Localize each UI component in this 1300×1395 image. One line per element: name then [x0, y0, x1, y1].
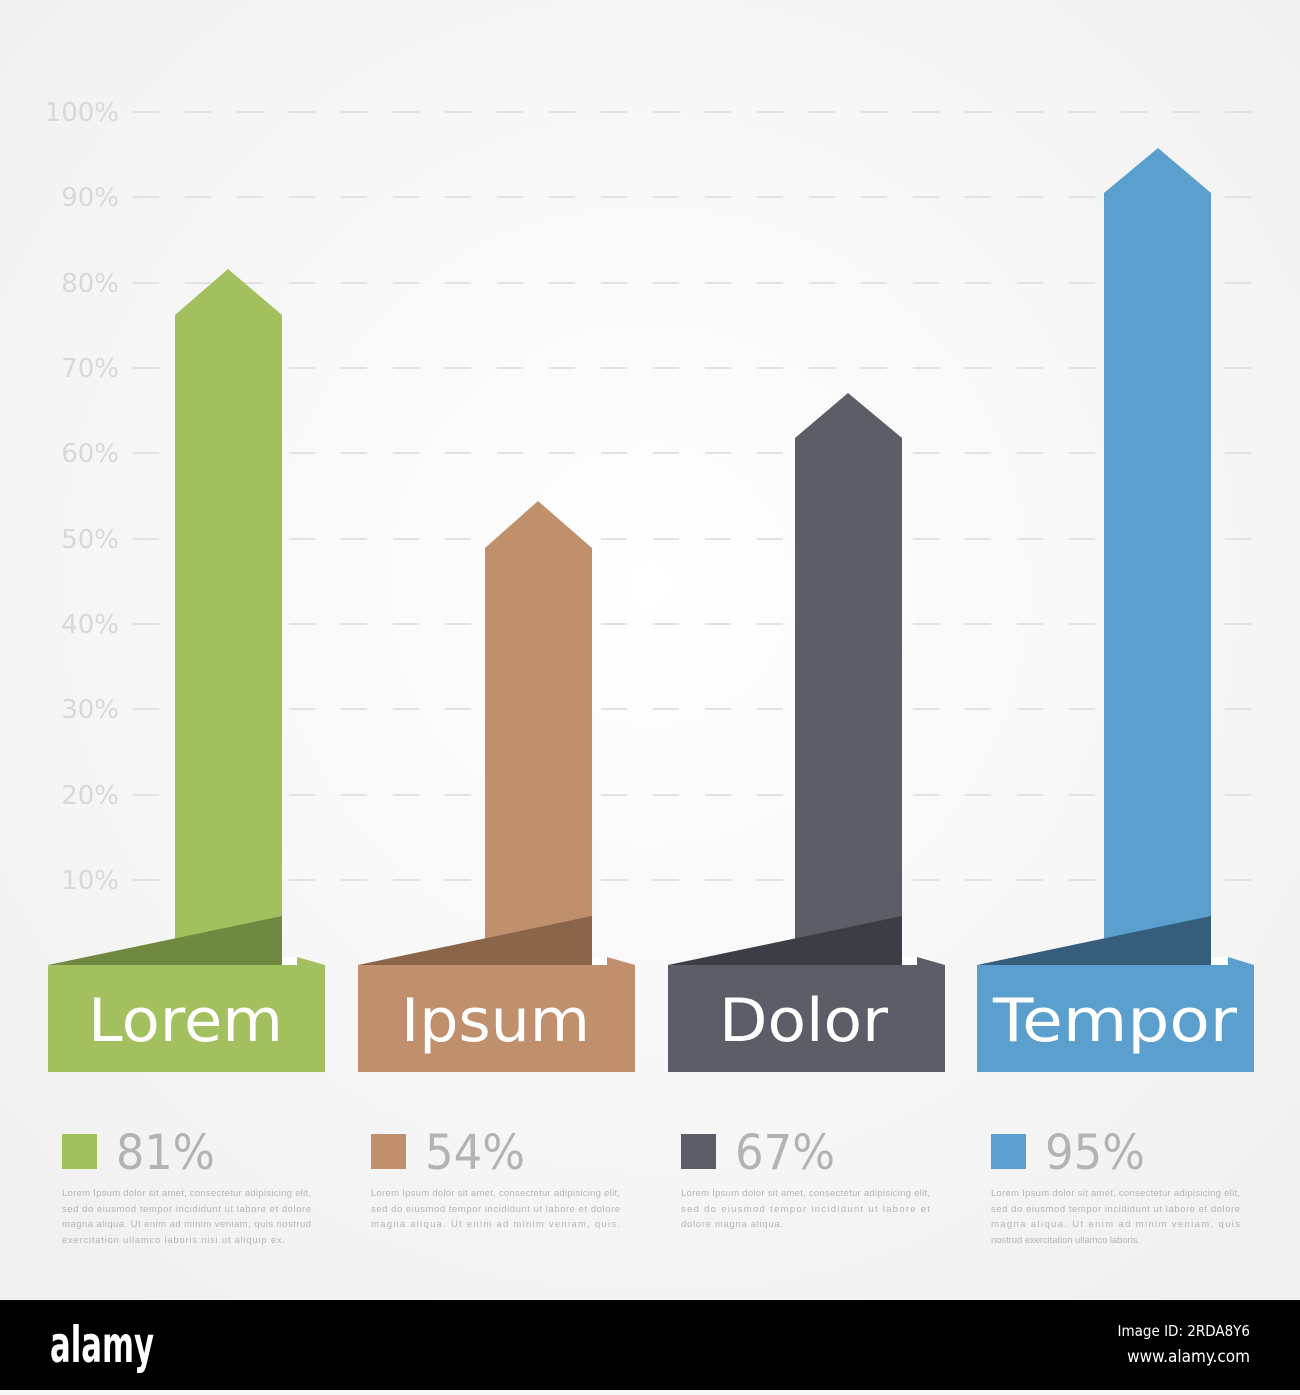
gridlines: [133, 112, 1256, 880]
axis labels: 90%: [61, 183, 119, 213]
legend: Tempor: nostrud exercitation ullamco laboris.: [991, 1235, 1140, 1246]
legend: Dolor: [681, 1125, 930, 1230]
axis labels: 80%: [61, 269, 119, 299]
footer bar: Image ID: 2RDA8Y6: [1118, 1322, 1250, 1340]
legend: Lorem: sed do eiusmod tempor incididunt ut labore et dolore: [62, 1204, 311, 1215]
axis labels: 30%: [61, 695, 119, 725]
legend: Tempor: sed do eiusmod tempor incididunt ut labore et dolore: [991, 1204, 1240, 1215]
axis labels: 60%: [61, 439, 119, 469]
legend: Dolor: 67%: [735, 1125, 835, 1181]
legend: Lorem: Lorem Ipsum dolor sit amet, consectetur adipisicing elit,: [62, 1188, 311, 1199]
legend: Dolor: Lorem Ipsum dolor sit amet, consectetur adipisicing elit,: [681, 1188, 930, 1199]
axis labels: 100%: [45, 98, 119, 128]
legend: Tempor: Lorem Ipsum dolor sit amet, consectetur adipisicing elit,: [991, 1188, 1240, 1199]
legend: Ipsum: sed do eiusmod tempor incididunt ut labore et dolore: [371, 1204, 620, 1215]
axis labels: 70%: [61, 354, 119, 384]
legend: Dolor: dolore magna aliqua.: [681, 1219, 783, 1230]
legend: Ipsum: [371, 1125, 620, 1230]
legend: Ipsum: Lorem Ipsum dolor sit amet, consectetur adipisicing elit,: [371, 1188, 620, 1199]
bar: Lorem: Lorem: [88, 986, 283, 1056]
axis labels: 10%: [61, 866, 119, 896]
legend: Dolor: sed do eiusmod tempor incididunt ut labore et: [681, 1204, 930, 1215]
axis labels: 50%: [61, 525, 119, 555]
legend: Lorem: [62, 1125, 311, 1246]
footer bar: [0, 1300, 1300, 1390]
bar: Dolor: [668, 393, 945, 1072]
legend: Ipsum: 54%: [425, 1125, 525, 1181]
bar: Dolor: Dolor: [719, 986, 888, 1056]
legend: Ipsum: magna aliqua. Ut enim ad minim veniam, quis.: [371, 1219, 620, 1230]
footer bar: alamy: [50, 1316, 154, 1374]
bar: Ipsum: Ipsum: [401, 986, 590, 1056]
footer bar: www.alamy.com: [1127, 1347, 1250, 1367]
bar: Ipsum: [358, 501, 635, 1072]
legend: Lorem: magna aliqua. Ut enim ad minim veniam, quis nostrud: [62, 1219, 311, 1230]
bar: Lorem: [48, 269, 325, 1072]
legend: Tempor: 95%: [1045, 1125, 1145, 1181]
legend: Tempor: magna aliqua. Ut enim ad minim veniam, quis: [991, 1219, 1240, 1230]
axis labels: 20%: [61, 781, 119, 811]
axis labels: [45, 98, 119, 896]
bar: Tempor: Tempor: [992, 986, 1237, 1056]
axis labels: 40%: [61, 610, 119, 640]
legend: Lorem: exercitation ullamco laboris nisi ut aliquip ex.: [62, 1235, 285, 1246]
legend: Tempor: [991, 1125, 1240, 1246]
legend: Lorem: 81%: [116, 1125, 215, 1181]
bar: Tempor: [977, 148, 1254, 1072]
